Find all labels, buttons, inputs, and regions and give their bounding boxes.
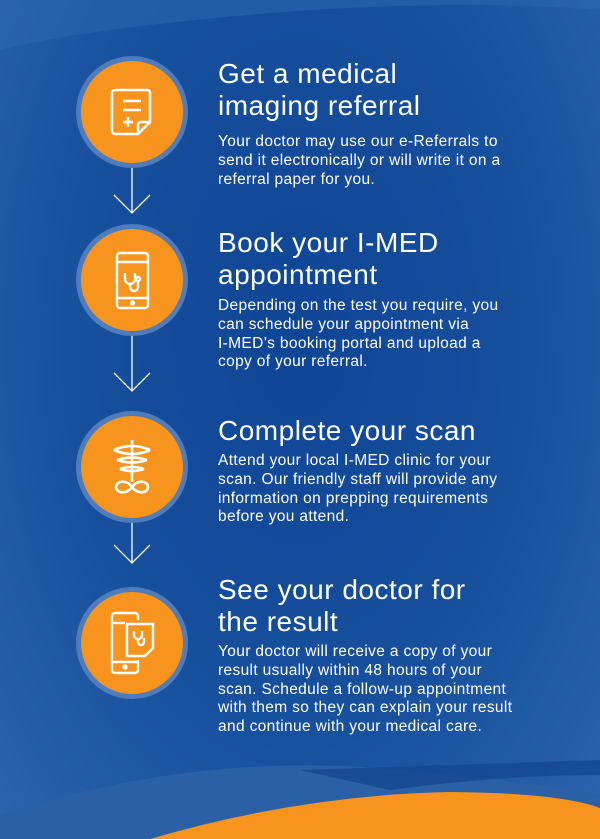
step 4 text (218, 643, 512, 735)
step 2 text: can schedule your appointment via (218, 316, 469, 333)
step 4 title: the result (218, 606, 338, 637)
step 4 text: and continue with your medical care. (218, 718, 482, 735)
step 4 text: scan. Schedule a follow-up appointment (218, 681, 506, 698)
step 1 text (218, 133, 500, 188)
step 1 text: Your doctor may use our e-Referrals to (218, 133, 498, 150)
step 1 text: referral paper for you. (218, 171, 375, 188)
step 2 text: I-MED’s booking portal and upload a (218, 335, 481, 352)
icon: phone with report (76, 587, 188, 699)
step 3 text: scan. Our friendly staff will provide any (218, 471, 497, 488)
step 4 title (218, 574, 466, 637)
step 3 text: information on prepping requirements (218, 490, 488, 507)
step 3 text (218, 452, 497, 525)
step 3 text: Attend your local I-MED clinic for your (218, 452, 491, 469)
step 1 text: send it electronically or will write it on a (218, 152, 500, 169)
step 2 text (218, 297, 498, 370)
step 4 text: Your doctor will receive a copy of your (218, 643, 492, 660)
step 3 title: Complete your scan (218, 415, 476, 446)
step 4 text: with them so they can explain your result (218, 699, 512, 716)
step 2 text: copy of your referral. (218, 353, 368, 370)
step 4 text: result usually within 48 hours of your (218, 662, 482, 679)
step 2 text: Depending on the test you require, you (218, 297, 498, 314)
step 2 title: Book your I-MED (218, 227, 439, 258)
icon: phone stethoscope (76, 224, 188, 336)
step 1 title (218, 58, 421, 121)
icon: ribcage (76, 411, 188, 523)
step 4 title: See your doctor for (218, 574, 466, 605)
step 2 title: appointment (218, 259, 378, 290)
step 1 title: imaging referral (218, 90, 421, 121)
icon: referral (76, 56, 188, 168)
step 1 title: Get a medical (218, 58, 397, 89)
step 2 title (218, 227, 439, 290)
step 3 text: before you attend. (218, 508, 349, 525)
